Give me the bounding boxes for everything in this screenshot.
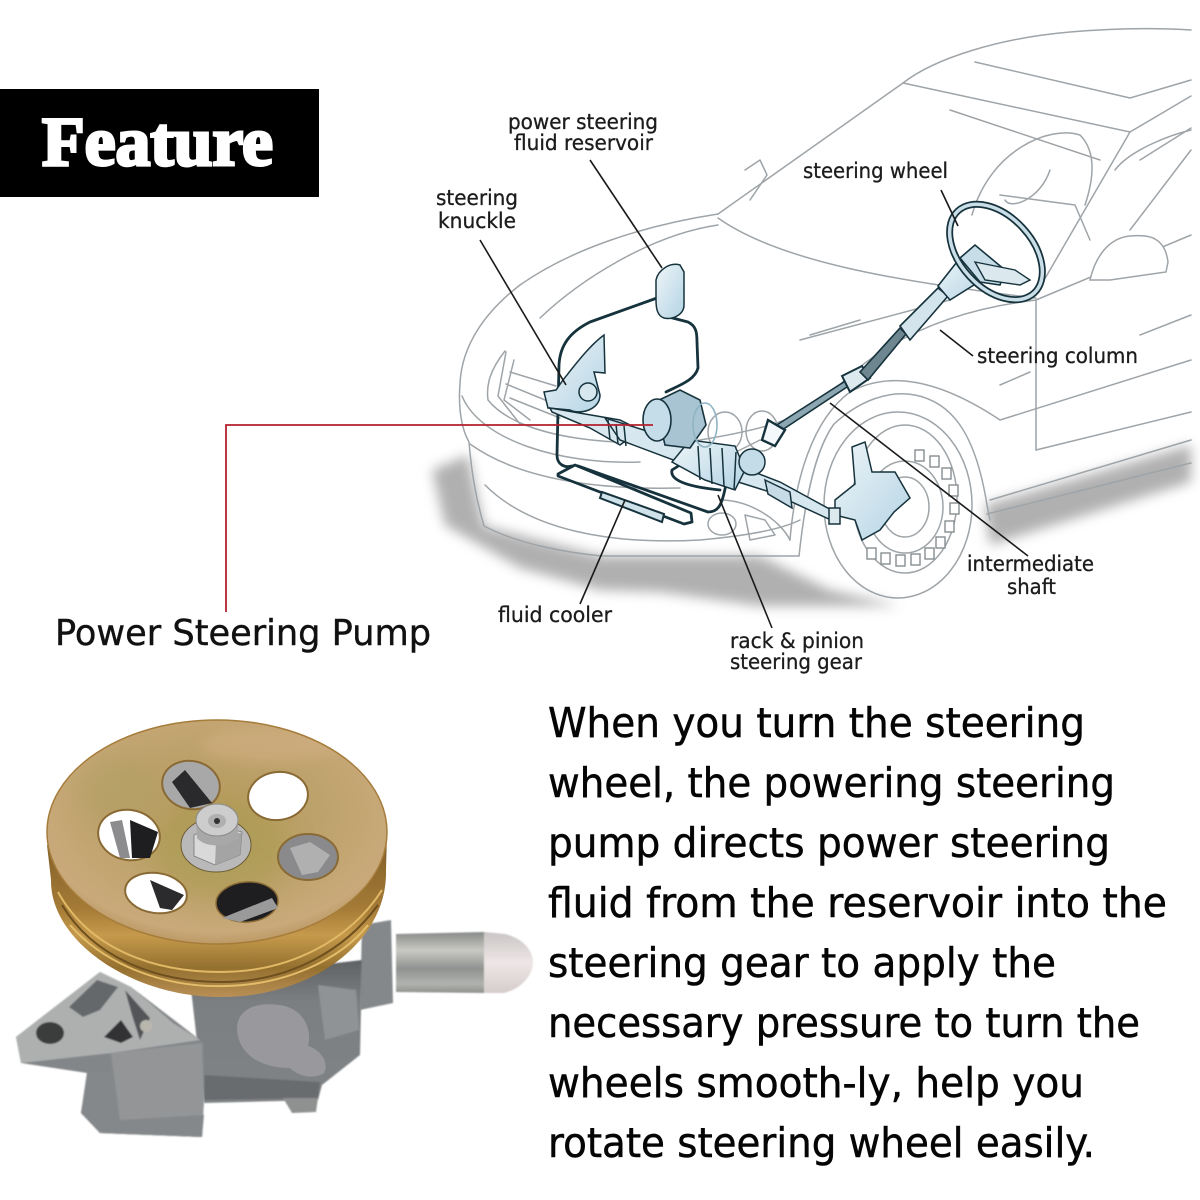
callout: power steering fluid reservoir: fluid reservoir <box>514 131 653 155</box>
car diagram <box>432 29 1191 674</box>
mounting bracket <box>16 972 204 1137</box>
power steering pump photo <box>16 720 533 1137</box>
wheel spoke holes <box>867 450 959 566</box>
steering knuckle left <box>544 335 640 445</box>
car body outline <box>459 29 1191 598</box>
callout: fluid cooler: fluid cooler <box>498 603 612 627</box>
side mirror <box>1090 236 1168 280</box>
adjuster knob <box>237 1004 326 1077</box>
callout: steering wheel: steering wheel <box>803 159 948 183</box>
pump label: Power Steering Pump <box>55 613 431 654</box>
callout: steering knuckle: steering <box>436 186 518 210</box>
steering column and intermediate shaft <box>762 245 1005 446</box>
callout: rack and pinion steering gear <box>730 629 864 674</box>
callout: power steering fluid reservoir <box>508 110 658 155</box>
description text: When you turn the steering <box>548 699 1085 747</box>
pulley face <box>47 720 387 944</box>
housing body <box>190 960 362 1113</box>
ground shadow <box>432 445 1191 606</box>
callout: rack and pinion steering gear: steering gear <box>730 650 862 674</box>
description text: wheels smooth-ly, help you <box>548 1059 1084 1107</box>
steering wheel <box>931 186 1061 318</box>
pulley holes <box>94 755 338 924</box>
description text: wheel, the powering steering <box>548 759 1115 807</box>
description text: necessary pressure to turn the <box>548 999 1140 1047</box>
callout: steering knuckle <box>436 186 518 233</box>
leader lines <box>480 160 1028 628</box>
description text: steering gear to apply the <box>548 939 1056 987</box>
red pointer line to pump <box>226 425 653 612</box>
fluid system pipes <box>557 298 726 524</box>
pulley side band <box>47 835 387 997</box>
callout: intermediate shaft: shaft <box>1007 575 1056 599</box>
pump on diagram <box>643 390 717 448</box>
callout: intermediate shaft: intermediate <box>967 552 1094 576</box>
wheel <box>824 412 972 598</box>
callout: intermediate shaft <box>967 552 1094 599</box>
feature heading banner: Feature <box>42 104 273 181</box>
callout: steering column: steering column <box>977 344 1138 368</box>
outlet stub <box>360 920 533 1010</box>
callout: rack and pinion steering gear: rack & pinion <box>730 629 864 653</box>
callout: power steering fluid reservoir: power steering <box>508 110 658 134</box>
fluid cooler body <box>600 492 664 522</box>
callout: steering knuckle: knuckle <box>438 209 516 233</box>
description text: rotate steering wheel easily. <box>548 1119 1095 1167</box>
centre nut <box>181 804 251 872</box>
description text: pump directs power steering <box>548 819 1110 867</box>
steering rack assembly <box>605 418 910 540</box>
reservoir <box>656 264 684 318</box>
feature heading banner <box>0 89 319 197</box>
description text <box>548 699 1167 1167</box>
description text: fluid from the reservoir into the <box>548 879 1167 927</box>
